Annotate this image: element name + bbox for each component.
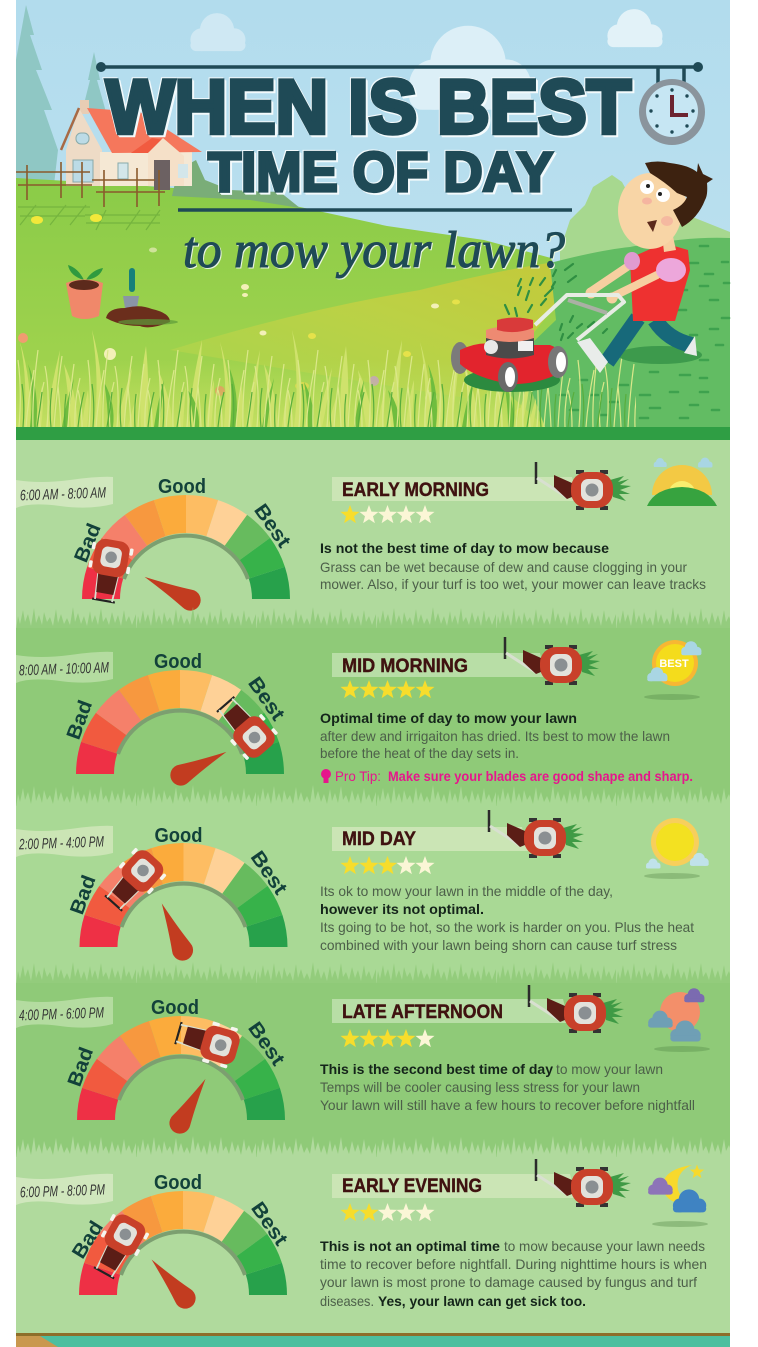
description [320,710,670,761]
icon: clock [639,79,705,145]
gauge: Good [151,997,199,1019]
icon: moon and clouds [648,1164,708,1227]
icon: best sun: BEST [659,658,689,670]
gauge: Bad [66,872,101,918]
description [320,1238,707,1309]
fence [16,162,165,207]
rating stars [340,856,435,874]
gauge: Best [243,1018,289,1070]
heading band: EARLY EVENING [342,1176,482,1197]
flower pot [66,265,103,319]
description [320,883,694,953]
grass clippings [505,264,607,340]
time banner [16,997,113,1028]
heading band [332,477,578,501]
man [577,162,713,373]
description: Its ok to mow your lawn in the middle of the day, [320,883,613,899]
gauge: Bad [63,697,97,743]
gauge: Best [249,500,295,552]
footer strip [16,1333,730,1347]
icon: sun [644,818,709,879]
title [106,65,631,279]
description: Grass can be wet because of dew and cause clogging in your [320,559,687,575]
description: diseases. [320,1293,374,1309]
rating stars [340,505,435,523]
heading band [332,1174,576,1198]
icon: cloudy sun [648,988,710,1052]
heading band: MID MORNING [342,656,468,677]
pine trees [16,5,106,185]
mown lawn [510,238,730,427]
title: to mow your lawn? [183,222,565,279]
pale bush behind the man [560,175,730,300]
gauge: Good [158,476,206,498]
rating stars [340,680,435,698]
time banner [16,826,113,857]
gauge: Good [154,1172,202,1194]
heading band [332,653,546,677]
lawn mower [451,295,624,392]
description: after dew and irrigaiton has dried. Its best to mow the lawn [320,728,670,744]
time banner [16,652,113,683]
time banner: 4:00 PM - 6:00 PM [19,1004,105,1024]
clouds [190,9,662,110]
pro tip: Make sure your blades are good shape and sharp. [388,769,693,784]
panel: mid morning [16,606,730,808]
description: Temps will be cooler causing less stress for your lawn [320,1079,640,1095]
heading band: EARLY MORNING [342,480,489,501]
tall grass foreground [16,320,636,427]
mowing dashes [560,246,729,418]
panel: mid day [16,784,730,986]
heading band [332,999,569,1023]
description: combined with your lawn being shorn can cause turf stress [320,937,677,953]
panel: late afternoon [16,961,730,1163]
heading band: MID DAY [342,829,416,850]
rating stars [340,1203,435,1221]
gauge [64,997,289,1138]
panel: hero illustration [16,0,730,440]
description: This is the second best time of day [320,1061,553,1077]
gauge [70,476,295,614]
distant bush [172,160,300,208]
gauge [63,651,289,789]
description: Its going to be hot, so the work is harder on you. Plus the heat [320,919,694,935]
panel: early evening [16,1135,730,1334]
clock sign bar [100,67,700,84]
pro tip: Pro Tip: [335,769,381,784]
description: Is not the best time of day to mow because [320,540,609,556]
gauge: Bad [68,1217,108,1263]
rating stars [340,1029,435,1047]
time banner: 8:00 AM - 10:00 AM [19,659,110,679]
gauge: Good [154,825,202,847]
gauge: Bad [64,1044,98,1090]
flowers [18,214,525,418]
description: to mow your lawn [556,1061,663,1077]
time banner [16,477,113,508]
title: WHEN IS BEST [106,65,631,150]
house [61,100,202,190]
gauge: Best [246,847,291,899]
trowel and dirt [106,268,178,327]
description: before the heat of the day sets in. [320,745,519,761]
icon: sunrise [647,458,717,506]
icon: mower [536,1159,631,1207]
time banner: 6:00 PM - 8:00 PM [20,1181,106,1201]
description: your lawn is most prone to damage caused by fungus and turf [320,1274,697,1290]
icon: mower [489,810,584,858]
description: This is not an optimal time [320,1238,500,1254]
time banner: 6:00 AM - 8:00 AM [20,484,107,504]
panel: early morning [16,440,730,630]
gauge: Good [154,651,202,673]
time banner: 2:00 PM - 4:00 PM [18,833,105,853]
title: TIME OF DAY [208,140,553,203]
gauge [68,1172,292,1313]
description: Your lawn will still have a few hours to recover before nightfall [320,1097,695,1113]
gauge: Bad [70,520,106,566]
gauge: Best [243,673,289,725]
heading band: LATE AFTERNOON [342,1002,503,1023]
lawn tile lines [18,205,160,230]
icon: mower [529,985,624,1033]
description: however its not optimal. [320,901,484,917]
gauge: Best [246,1198,292,1250]
icon: mower [505,637,600,685]
icon: best sun [644,640,702,700]
heading band [332,827,528,851]
description [320,540,706,592]
description: time to recover before nightfall. During nighttime hours is when [320,1256,707,1272]
green hill [16,178,570,427]
description: to mow because your lawn needs [504,1238,705,1254]
gauge [66,825,291,964]
yellow mown band [170,262,560,400]
icon: mower [536,462,631,510]
time banner [16,1174,113,1205]
description: Yes, your lawn can get sick too. [378,1293,586,1309]
description: Optimal time of day to mow your lawn [320,710,577,726]
description [320,1061,695,1113]
description: mower. Also, if your turf is too wet, your mower can leave tracks [320,576,706,592]
